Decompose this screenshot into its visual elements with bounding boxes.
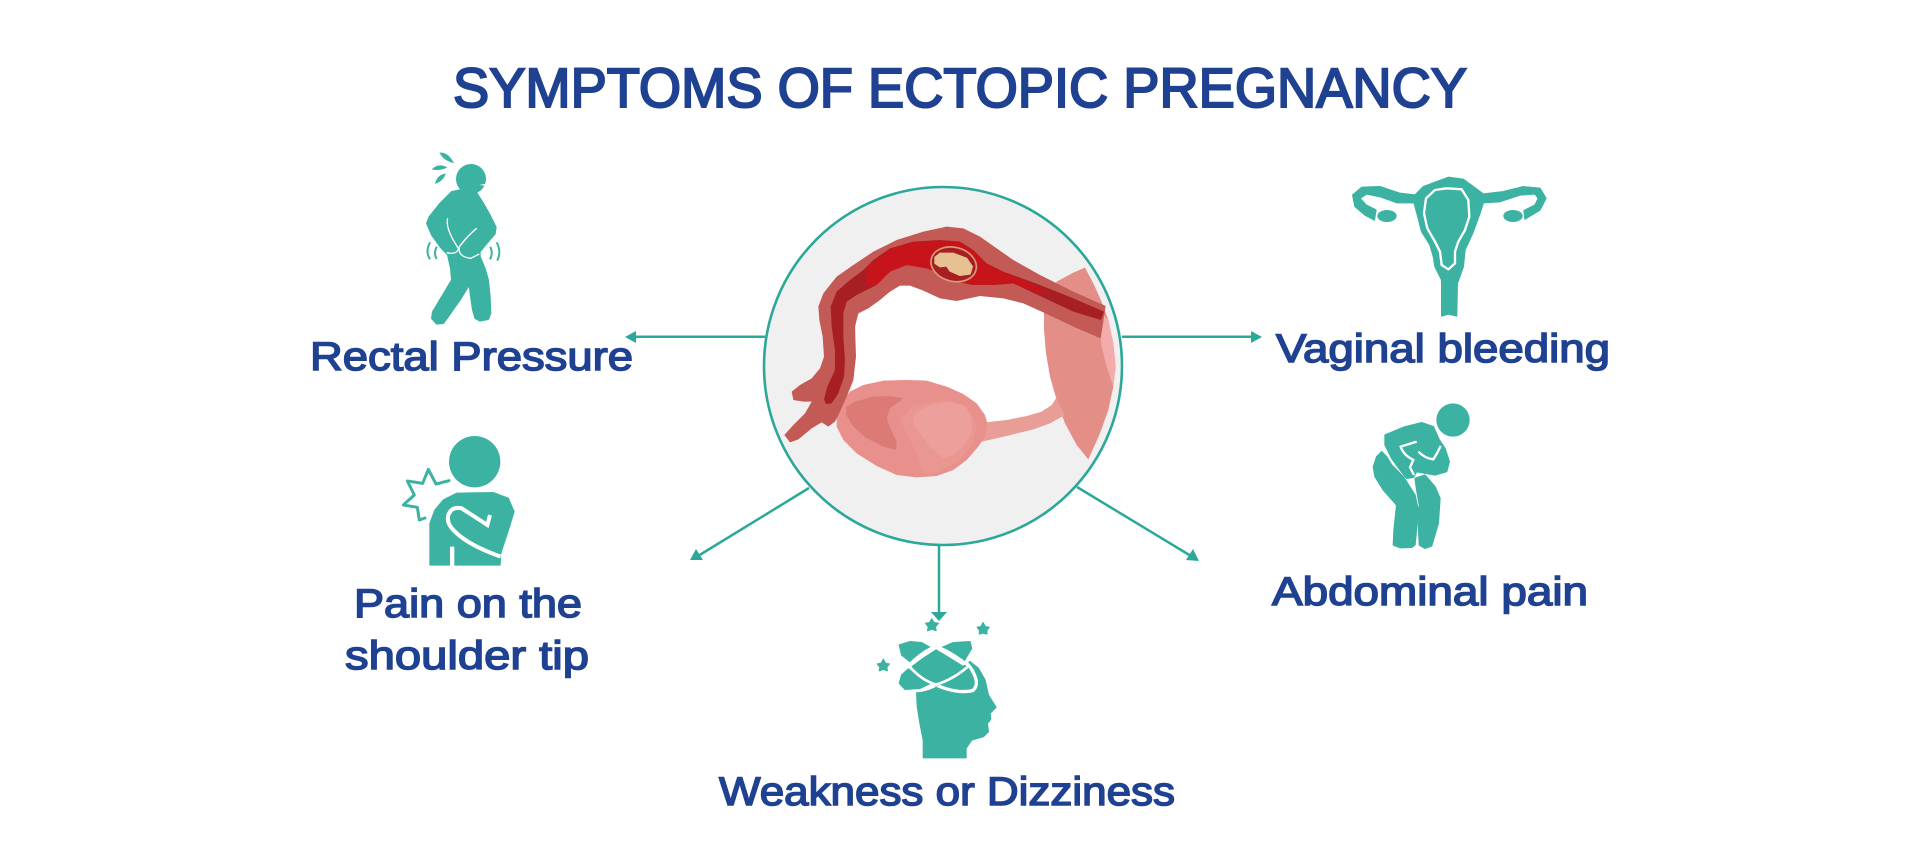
label: vaginal bleeding: Vaginal bleeding — [1276, 327, 1610, 371]
arrow: to vaginal bleeding — [1122, 331, 1262, 343]
inner cavity — [1424, 188, 1469, 269]
stars — [877, 619, 989, 671]
motion marks — [427, 242, 499, 261]
head — [1436, 403, 1470, 437]
icon: shoulder pain person — [403, 436, 514, 565]
ovary inner light — [913, 402, 972, 458]
icon: dizzy head — [877, 619, 996, 758]
fallopian tube bright lumen — [865, 241, 1050, 294]
mouth — [479, 183, 487, 186]
arrow: to abdominal pain — [1077, 487, 1199, 561]
arrow: to weakness or dizziness — [931, 545, 947, 621]
orbit white line — [910, 663, 976, 692]
body — [427, 189, 496, 324]
uterus — [1044, 268, 1116, 459]
head — [449, 436, 500, 487]
label: abdominal pain: Abdominal pain — [1272, 570, 1588, 614]
icon: abdominal pain person — [1373, 403, 1470, 548]
central anatomy illustration — [764, 187, 1122, 545]
hands outline — [447, 218, 479, 258]
back leg — [1373, 452, 1418, 548]
body — [430, 493, 514, 565]
ovary mid band — [900, 400, 977, 475]
icon: rectal pressure person — [427, 153, 499, 324]
torso and arm — [1385, 423, 1449, 478]
ovary inner dark — [846, 396, 903, 450]
pain marks — [432, 153, 454, 184]
ovarian ligament — [982, 398, 1065, 442]
icon: uterus — [1353, 177, 1546, 316]
arrow: to rectal pressure — [625, 331, 765, 343]
fallopian tube dark lumen — [824, 240, 1104, 404]
white interior — [852, 277, 1060, 428]
embryo — [935, 253, 972, 275]
ovaries — [1377, 210, 1397, 222]
front leg — [1415, 475, 1440, 548]
label: rectal pressure: Rectal Pressure — [310, 335, 633, 379]
lobe dividers — [909, 647, 969, 685]
pain burst — [403, 469, 449, 520]
head — [456, 164, 486, 194]
uterus body and tubes — [1353, 177, 1546, 316]
label: pain on the shoulder tip: Pain on the — [354, 582, 582, 626]
circle background — [764, 187, 1122, 545]
brain lobes — [899, 642, 931, 662]
ovary — [837, 380, 987, 477]
fallopian tube outer wall — [784, 227, 1106, 442]
label: weakness or dizziness: Weakness or Dizziness — [719, 770, 1175, 814]
arm outline — [1401, 442, 1441, 475]
ectopic gestational sac — [927, 242, 980, 286]
arm outline — [448, 508, 501, 557]
arrow: to shoulder tip — [690, 488, 809, 560]
label: pain on the shoulder tip — [345, 582, 589, 678]
uterus highlight — [1099, 313, 1116, 387]
title: SYMPTOMS OF ECTOPIC PREGNANCY — [453, 56, 1467, 119]
label: pain on the shoulder tip: shoulder tip — [345, 634, 589, 678]
head silhouette — [917, 662, 996, 758]
